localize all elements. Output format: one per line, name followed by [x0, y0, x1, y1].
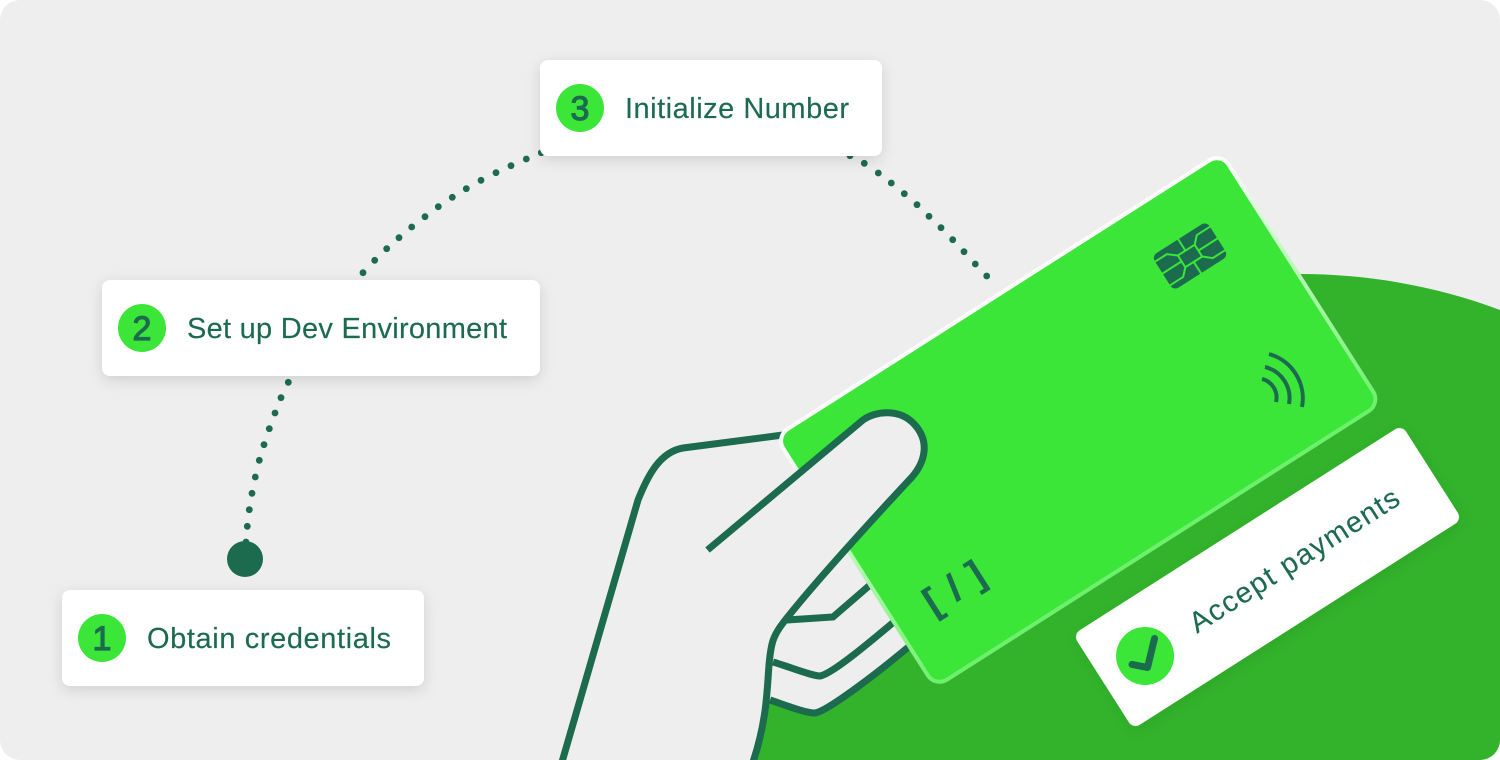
- thumb outline: [708, 413, 924, 760]
- step 2 label: [102, 280, 540, 376]
- icon: check badge: [1116, 627, 1174, 685]
- payment card: [776, 153, 1381, 687]
- accept payments label: [1073, 425, 1462, 729]
- step 2 label: Set up Dev Environment: [187, 313, 507, 345]
- icon: card chip: [1151, 221, 1229, 291]
- icon: card logo: [ / ]: [916, 554, 993, 623]
- step 1 label: Obtain credentials: [147, 623, 391, 655]
- step 1 label: [62, 590, 424, 686]
- step 2 label: 2: [133, 310, 151, 348]
- step 3 label: [540, 60, 882, 156]
- accept payments label: Accept payments: [1184, 482, 1406, 640]
- dotted path: step 2 to step 3: [360, 149, 545, 276]
- dotted path: step 3 to card: [847, 152, 990, 279]
- start dot: [227, 541, 263, 577]
- hand: palm and fingers behind card: [562, 435, 920, 760]
- dark green backdrop shape: [740, 274, 1500, 760]
- dotted path: step 1 to step 2: [243, 379, 292, 545]
- step 3 label: 3: [571, 90, 589, 128]
- icon: contactless waves: [1262, 354, 1303, 407]
- hand: thumb over card: [708, 413, 924, 650]
- step 3 label: Initialize Number: [625, 93, 849, 125]
- step 1 label: 1: [93, 620, 111, 658]
